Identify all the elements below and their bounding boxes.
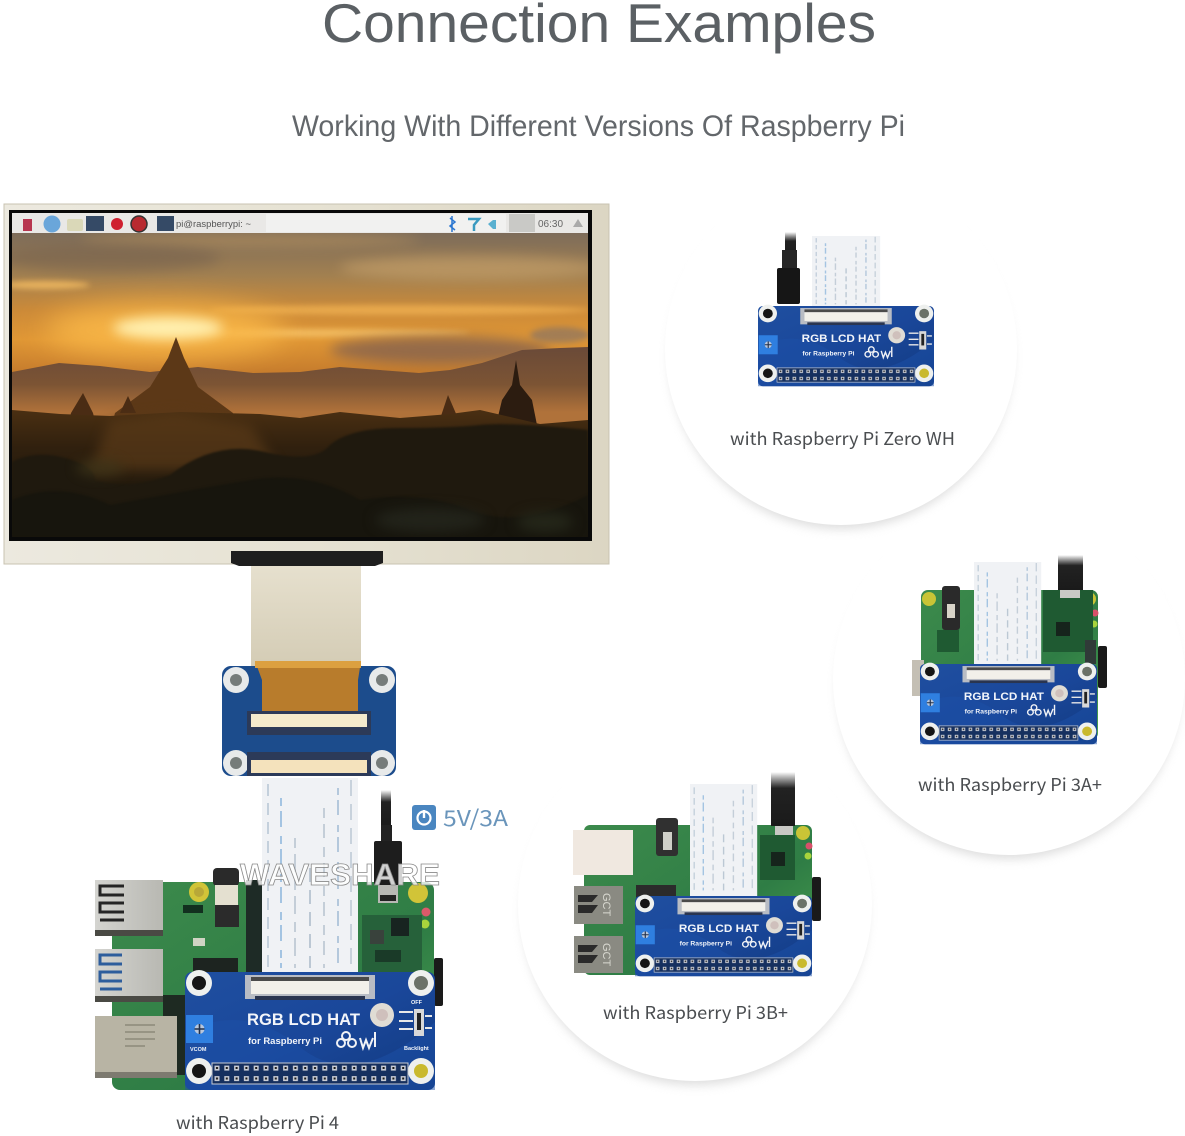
HAT board: RGB LCD HAT (679, 923, 759, 935)
HAT board: RGB LCD HAT (964, 691, 1044, 703)
taskbar icon: volume (488, 220, 496, 229)
display frame (4, 204, 609, 564)
power cable (771, 772, 795, 826)
adapter board (222, 661, 396, 776)
flat cable (812, 236, 880, 308)
sunset photo on screen (0, 213, 600, 537)
caption: with Raspberry Pi 3B+ (603, 1000, 788, 1025)
HAT board (635, 895, 812, 976)
HAT subtitle: for Raspberry Pi (248, 1036, 322, 1047)
backlight label: Backlight (404, 1046, 429, 1052)
taskbar icon: menu (23, 219, 32, 231)
power cable (374, 790, 402, 903)
watermark: WAVESHARE (240, 857, 440, 892)
HAT board: for Raspberry Pi (965, 709, 1017, 716)
desktop taskbar: 06:30 (538, 219, 563, 230)
HAT board: for Raspberry Pi (802, 351, 855, 358)
taskbar icon: wolfram (131, 216, 147, 232)
audio jack (213, 868, 239, 927)
OFF label: OFF (411, 1000, 423, 1006)
caption: with Raspberry Pi Zero WH (730, 426, 955, 451)
panel: Raspberry Pi Zero WH circle (665, 173, 1017, 529)
taskbar icon: terminal window (157, 216, 174, 231)
Pi 3B+ board (573, 818, 821, 975)
HAT board (920, 663, 1097, 744)
caption: Raspberry Pi 4: with Raspberry Pi 4 (176, 1110, 339, 1135)
connector 1 (247, 711, 371, 735)
flat cable (974, 562, 1041, 666)
Pi 3B+ board: GCT (600, 943, 612, 966)
subtitle: Working With Different Versions Of Raspberry Pi (292, 110, 905, 143)
Raspberry Pi 4 assembly (95, 778, 443, 1090)
taskbar icon: eject (573, 219, 583, 227)
taskbar icon: terminal (86, 216, 104, 231)
mountains (12, 347, 588, 424)
connector 2 (247, 752, 371, 776)
icon: power (412, 805, 436, 830)
HAT board: for Raspberry Pi (680, 941, 732, 948)
Pi 3A+ board (912, 586, 1107, 740)
power cable (1058, 555, 1083, 590)
taskbar clock area (509, 214, 535, 232)
USB port lower (95, 949, 163, 1002)
taskbar icon: bluetooth (450, 216, 455, 232)
HAT board (185, 970, 435, 1090)
panel: Raspberry Pi 3A+ circle (833, 503, 1185, 859)
mounting holes (223, 667, 395, 776)
temple silhouettes (70, 337, 537, 424)
desktop taskbar (12, 213, 588, 233)
HAT board (758, 305, 934, 386)
tree line (12, 410, 588, 537)
power cable (777, 232, 800, 304)
caption: with Raspberry Pi 3A+ (918, 772, 1102, 797)
flat cable (262, 778, 358, 978)
power rating: 5V/3A (443, 801, 509, 833)
power callout (412, 801, 509, 833)
Pi 3B+ board: GCT (600, 893, 612, 916)
Ethernet port (95, 1016, 177, 1078)
taskbar icon: folder (67, 219, 83, 231)
HAT name: RGB LCD HAT (247, 1011, 360, 1029)
display connector strip (231, 551, 383, 566)
HAT board: RGB LCD HAT (802, 333, 881, 345)
board (112, 880, 443, 1090)
flat cable (690, 784, 757, 896)
USB port upper (95, 880, 163, 936)
display ribbon cable (251, 566, 361, 666)
orange flex (255, 661, 361, 714)
taskbar window title: pi@raspberrypi: ~ (176, 219, 251, 229)
LCD display (0, 204, 609, 566)
VCOM label: VCOM (190, 1047, 207, 1053)
taskbar icon: wifi (468, 219, 479, 231)
panel: Raspberry Pi 3B+ circle (518, 727, 872, 1085)
taskbar icon: globe (44, 216, 60, 232)
taskbar icon: raspberry (111, 218, 123, 230)
